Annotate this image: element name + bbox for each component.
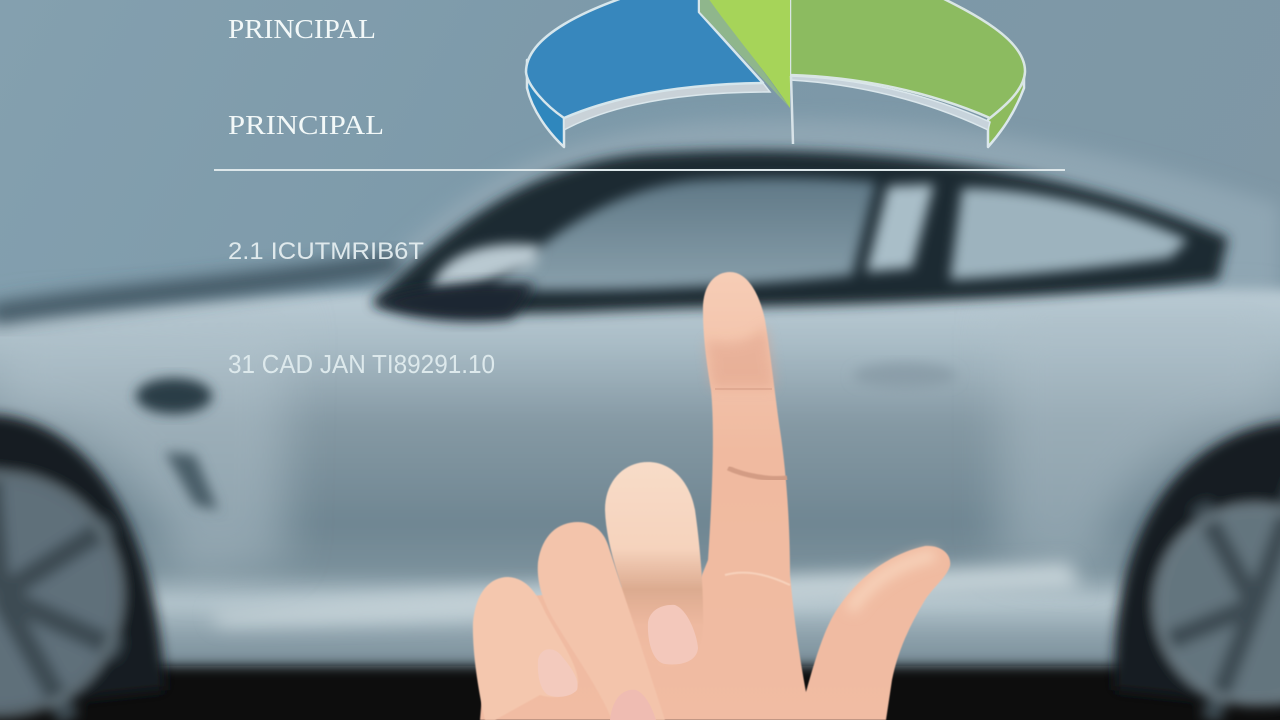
car body: [0, 290, 1280, 680]
pinky nail: [538, 649, 578, 697]
palm and index finger: [480, 272, 950, 720]
ring finger: [538, 522, 665, 720]
window reflection: [866, 184, 934, 272]
index crease upper: [715, 388, 772, 390]
hand pointing up: [473, 272, 950, 720]
middle finger: [605, 462, 703, 667]
pinky finger: [473, 577, 578, 720]
centre stem: [791, 76, 793, 144]
horizontal rule: [214, 169, 1065, 171]
body lighter front fender: [0, 310, 290, 580]
index crease lower: [728, 468, 787, 479]
front wheel: [0, 414, 165, 720]
label: principal two: PRINCIPAL: [228, 110, 384, 140]
rear window: [950, 188, 1188, 280]
green slice inner rim: [790, 76, 990, 130]
side mirror: [432, 244, 540, 292]
blue slice inner rim: [564, 83, 770, 130]
lime wedge: [706, 0, 790, 108]
body lighter rear fender: [1000, 310, 1280, 570]
rear wheel: [1115, 420, 1280, 720]
green slice side: [988, 66, 1024, 147]
blue slice side: [527, 60, 564, 147]
label: loan line: 31 CAD JAN TI89291.10: [228, 349, 495, 379]
front vent: [165, 452, 218, 510]
door handle front: [136, 378, 212, 414]
label: principal one: PRINCIPAL: [228, 14, 376, 44]
side window: [490, 178, 876, 290]
mirror shadow: [372, 283, 535, 321]
ring nail: [610, 690, 656, 720]
lime wedge shadow: [700, 0, 790, 108]
blue slice top: [526, 0, 763, 118]
palm crease: [725, 573, 790, 585]
ground shadow: [0, 666, 1280, 720]
hood edge: [0, 262, 400, 315]
window frame: [372, 150, 1228, 314]
car roof highlight: [380, 119, 1280, 320]
sill highlight: [210, 562, 1080, 626]
thumb highlight: [850, 555, 935, 610]
green slice top: [790, 0, 1025, 118]
door handle rear: [853, 363, 957, 389]
3D pie chart: [526, 0, 1025, 147]
label: interest line: 2.1 ICUTMRIB6T: [228, 238, 424, 265]
middle nail: [648, 605, 698, 664]
index finger tip shade: [706, 325, 774, 388]
